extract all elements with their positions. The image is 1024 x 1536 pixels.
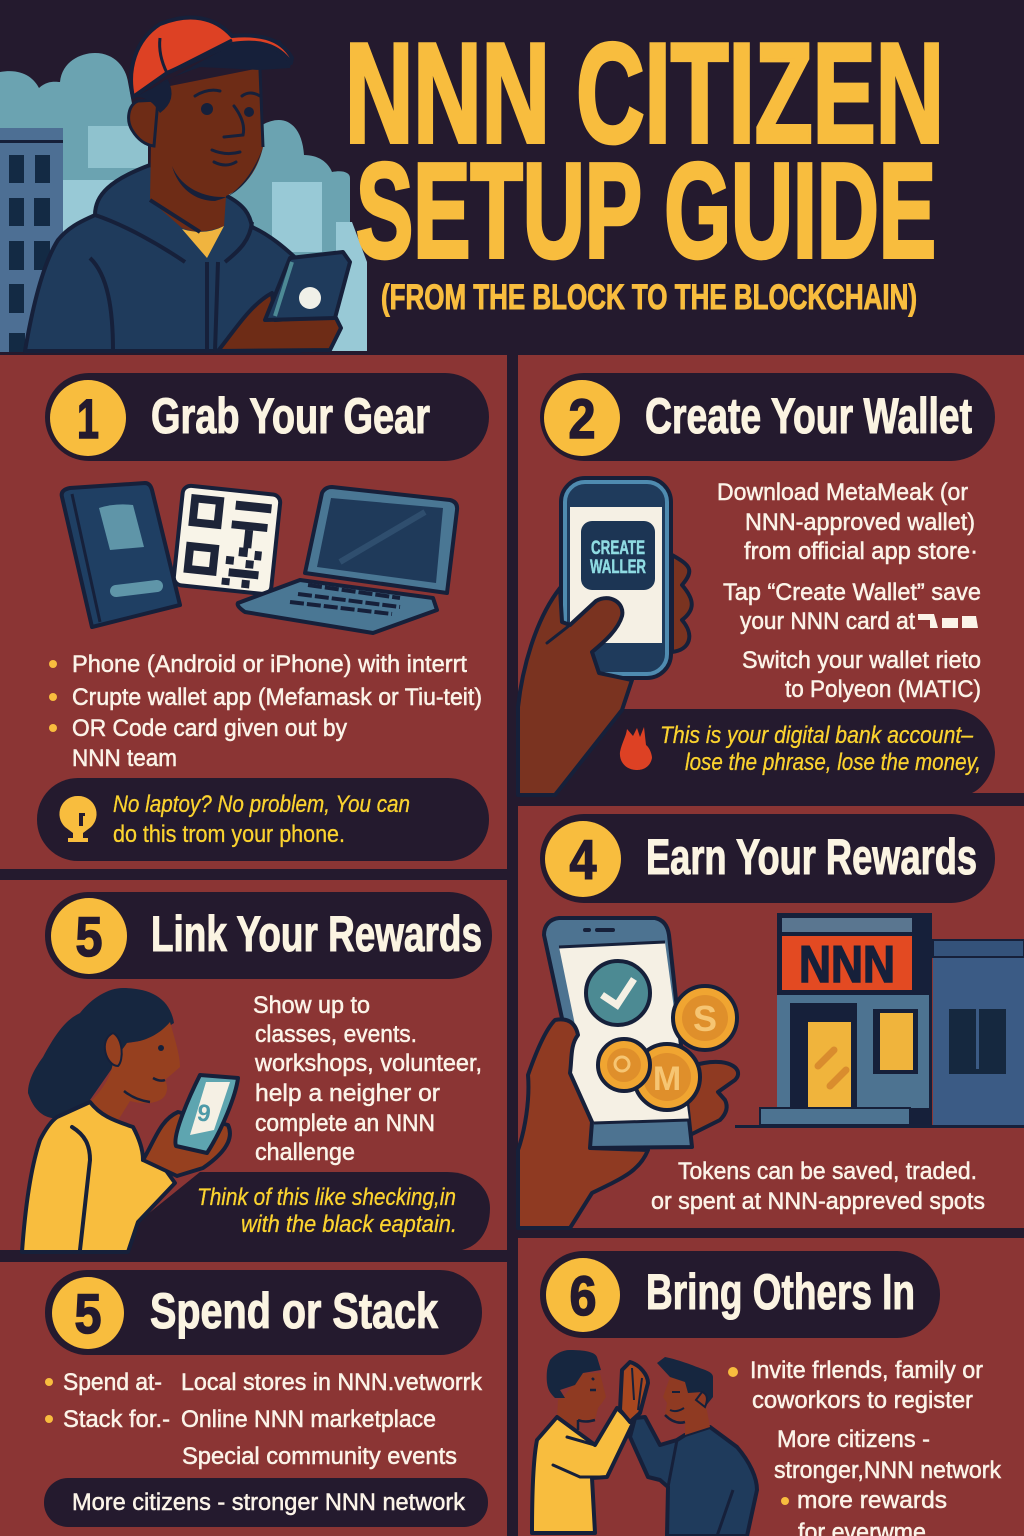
button: create wallet bbox=[581, 521, 655, 590]
step text: coworkors to register bbox=[752, 1387, 973, 1414]
heading bbox=[540, 1251, 940, 1338]
header banner bbox=[0, 14, 944, 352]
heading bbox=[540, 373, 995, 461]
spend and stack list: Stack for.- bbox=[63, 1406, 170, 1433]
store sign: NNN bbox=[799, 936, 895, 994]
step text: classes, events. bbox=[255, 1021, 417, 1048]
building bbox=[0, 128, 63, 352]
heading: Grab Your Gear bbox=[151, 388, 430, 444]
heading: 1 bbox=[77, 387, 99, 450]
spend and stack list: Special community events bbox=[182, 1443, 457, 1470]
bullet list: OR Code card given out by bbox=[72, 715, 347, 742]
illustration: hand phone and coins: M bbox=[653, 1060, 681, 1098]
step text: Download MetaMeak (or bbox=[717, 479, 968, 506]
heading bbox=[540, 814, 995, 903]
panel: step 1 grab your gear bbox=[0, 355, 507, 869]
panel: step 2 create your wallet bbox=[518, 355, 1024, 800]
phone bbox=[265, 252, 350, 320]
step text: Show up to bbox=[253, 992, 370, 1019]
heading: Bring Others In bbox=[646, 1264, 915, 1320]
heading bbox=[45, 892, 492, 979]
hand bbox=[218, 293, 341, 351]
caption bbox=[651, 1158, 985, 1215]
spend and stack list: Online NNN marketplace bbox=[181, 1406, 436, 1433]
step text: NNN-approved wallet) bbox=[745, 509, 975, 536]
callout: no laptop: do this trom your phone. bbox=[113, 821, 345, 848]
callout: think of this: Think of this like shecking,in bbox=[197, 1184, 456, 1211]
bullet list: Phone (Android or iPhone) with interrt bbox=[72, 651, 467, 678]
person in blue bbox=[630, 1357, 757, 1536]
callout: no laptop bbox=[37, 778, 489, 861]
panel: step 5 link your rewards bbox=[0, 880, 507, 1252]
button: create wallet: WALLER bbox=[590, 557, 646, 578]
button: create wallet: CREATE bbox=[591, 538, 645, 559]
step text: challenge bbox=[255, 1139, 355, 1166]
step text: more rewards bbox=[797, 1487, 947, 1514]
illustration: two people high five bbox=[532, 1350, 757, 1536]
illustration: NNN store bbox=[735, 913, 1024, 1128]
step text bbox=[253, 992, 482, 1166]
bullet list: NNN team bbox=[72, 745, 177, 772]
illustration: woman with phone bbox=[22, 988, 238, 1252]
illustration: woman with phone: 9 bbox=[195, 1099, 212, 1128]
person in yellow bbox=[532, 1350, 648, 1533]
spend and stack list: Local stores in NNN.vetworrk bbox=[181, 1369, 483, 1396]
callout: digital bank account: This is your digital bank account– bbox=[660, 722, 974, 749]
heading: 5 bbox=[74, 1282, 102, 1345]
step text: workshops, volunteer, bbox=[254, 1050, 482, 1077]
heading: 6 bbox=[570, 1264, 596, 1327]
illustration: hand holding phone bbox=[518, 478, 692, 795]
callout: think of this: with the black eaptain. bbox=[241, 1211, 457, 1238]
icon: light bulb bbox=[59, 796, 97, 842]
icon: flame bbox=[620, 727, 652, 770]
icon: QR card bbox=[173, 485, 281, 595]
heading: 5 bbox=[76, 905, 102, 968]
heading bbox=[45, 373, 489, 461]
cap bbox=[150, 40, 292, 90]
step text: Switch your wallet rieto bbox=[742, 647, 981, 674]
step text: to Polyeon (MATIC) bbox=[785, 676, 981, 703]
callout: no laptop: No laptoy? No problem, You can bbox=[113, 791, 410, 818]
step text: help a neigher or bbox=[255, 1080, 440, 1107]
neck and face bbox=[150, 68, 263, 232]
step text: stronger,NNN network bbox=[774, 1457, 1002, 1484]
step text: your NNN card at bbox=[740, 608, 915, 635]
heading: 4 bbox=[570, 828, 596, 891]
panel: step 6 bring others in bbox=[518, 1238, 1024, 1536]
step text: Tap “Create Wallet” save bbox=[723, 579, 981, 606]
icon: laptop bbox=[238, 487, 457, 633]
heading: Link Your Rewards bbox=[151, 906, 482, 962]
caption: Tokens can be saved, traded. bbox=[678, 1158, 977, 1185]
step text bbox=[717, 479, 981, 703]
callout: digital bank account: lose the phrase, lose the money, bbox=[685, 749, 981, 776]
callout: think of this bbox=[128, 1172, 490, 1250]
hoodie bbox=[25, 165, 300, 351]
bullet list bbox=[49, 651, 482, 772]
step text: from official app store· bbox=[744, 538, 978, 565]
step text bbox=[728, 1357, 1002, 1536]
ear bbox=[129, 100, 158, 146]
callout: stronger network bbox=[44, 1478, 488, 1527]
spend and stack list: Spend at- bbox=[63, 1369, 162, 1396]
illustration: man with phone in city bbox=[0, 18, 367, 352]
hoodie detail bbox=[90, 200, 252, 351]
icon: phone bbox=[62, 483, 180, 627]
heading: Spend or Stack bbox=[150, 1283, 438, 1339]
illustration: hand phone and coins bbox=[518, 918, 738, 1228]
shirt bbox=[182, 226, 224, 258]
caption: or spent at NNN-appreved spots bbox=[651, 1188, 985, 1215]
panel: step 4 earn your rewards bbox=[518, 806, 1024, 1228]
bullet list: Crupte wallet app (Mefamask or Tiu-teit) bbox=[72, 684, 482, 711]
spend and stack list bbox=[45, 1369, 483, 1470]
step text: More citizens - bbox=[777, 1426, 930, 1453]
callout: digital bank account bbox=[518, 709, 1024, 800]
title bbox=[345, 14, 944, 286]
illustration: hand phone and coins: S bbox=[693, 998, 717, 1039]
step text: complete an NNN bbox=[255, 1110, 435, 1137]
panel: step 5 spend or stack bbox=[0, 1262, 507, 1536]
heading bbox=[45, 1270, 482, 1355]
step text: Invite frlends, family or bbox=[750, 1357, 983, 1384]
heading: 2 bbox=[568, 387, 596, 450]
callout: stronger network: More citizens - stronger NNN network bbox=[72, 1489, 466, 1516]
